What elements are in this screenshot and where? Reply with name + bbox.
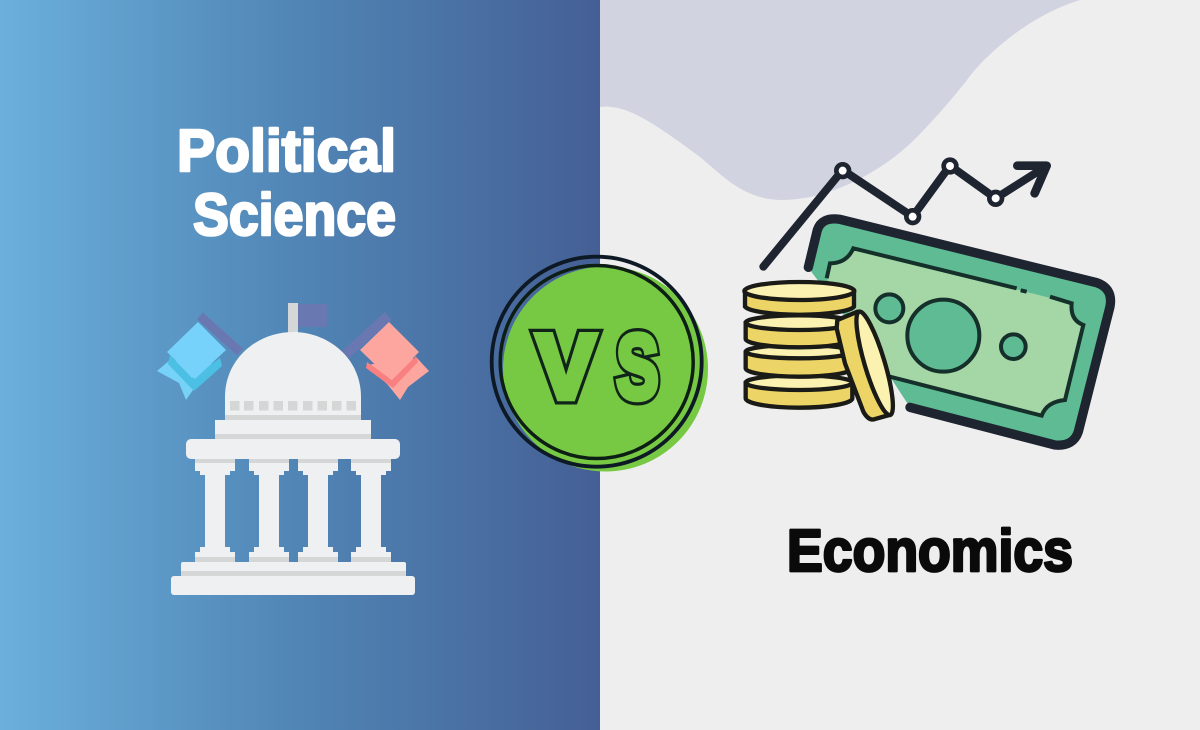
icon: blue flag (157, 316, 240, 400)
icon: money, coins and chart (744, 160, 1111, 445)
icon: leaning coin (837, 309, 900, 420)
green disc (503, 266, 708, 472)
icon: dome (225, 332, 361, 420)
heading: Economics: Economics (787, 518, 1073, 584)
inner ring (500, 266, 693, 458)
roof tier (215, 420, 371, 439)
icon: government building (157, 303, 429, 595)
base steps (171, 562, 415, 595)
text: VS green fill: V (536, 317, 596, 418)
heading: Political Science: Science (193, 182, 396, 248)
text: VS dark outline: V (536, 317, 596, 418)
icon: dome flag (288, 303, 327, 335)
decorative lavender blob (600, 0, 1080, 200)
heading: Political Science: Political (177, 118, 396, 184)
badge: VS (492, 257, 708, 472)
columns (195, 459, 391, 562)
text: VS dark outline: S (616, 317, 658, 418)
icon: red flag (345, 316, 429, 400)
entablature (186, 439, 400, 459)
heading: Political Science (177, 118, 396, 248)
panel: left blue background (0, 0, 600, 730)
outer ring (492, 257, 702, 467)
icon: banknote (808, 219, 1111, 445)
text: VS green fill (536, 317, 658, 418)
text: VS green fill: S (616, 317, 658, 418)
panel: right light background (600, 0, 1200, 730)
icon: coin stack (744, 282, 854, 408)
text: VS dark outline (536, 317, 658, 418)
icon: rising line chart (763, 160, 1047, 267)
